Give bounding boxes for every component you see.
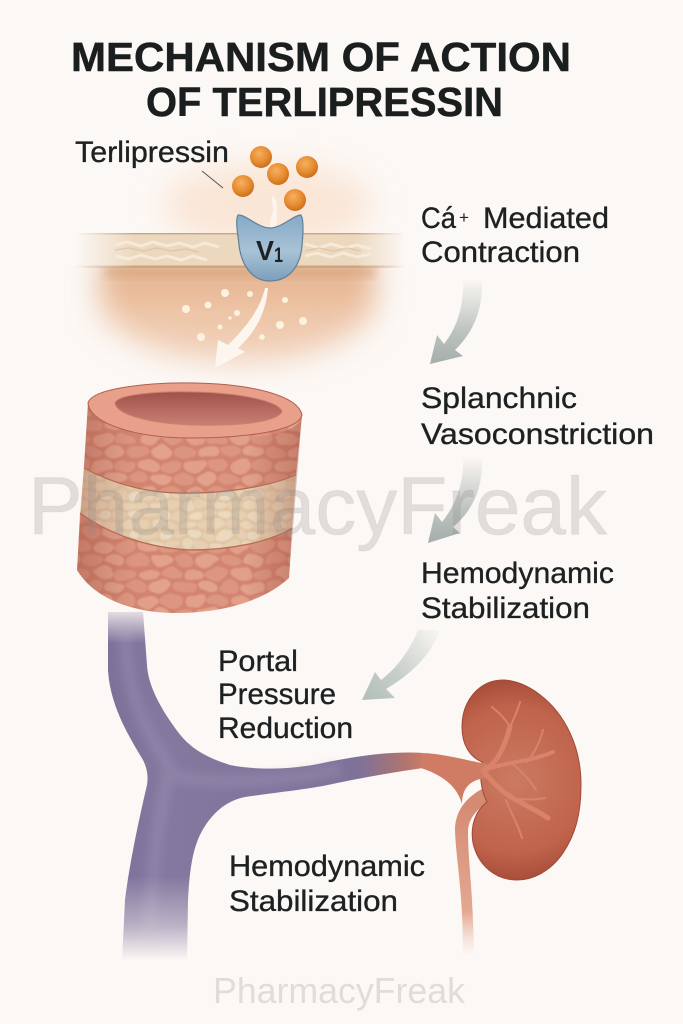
label: splanchnic vasoconstriction: Vasoconstriction (421, 418, 654, 451)
lower muscle layer (77, 514, 292, 613)
label: calcium mediated contraction (421, 202, 609, 269)
panel: receptor and cell membrane (75, 163, 405, 368)
renal artery branches (484, 702, 553, 838)
icon: terlipressin molecules (232, 146, 318, 211)
label: calcium mediated contraction: Mediated (483, 202, 609, 235)
portal vein and renal vessel (108, 612, 423, 962)
label: calcium mediated contraction: + (459, 208, 469, 227)
arrow: stabilization to portal pressure (362, 630, 440, 700)
label: hemodynamic stabilization lower: Stabilization (229, 885, 398, 918)
cell interior particles (182, 289, 307, 341)
label: hemodynamic stabilization upper (421, 557, 614, 625)
label: portal pressure reduction: Portal (218, 645, 298, 678)
icon: kidney (421, 680, 581, 955)
label: hemodynamic stabilization lower (229, 850, 425, 918)
label: hemodynamic stabilization upper: Hemodynamic (421, 557, 614, 590)
renal artery trunk (421, 753, 490, 804)
label: calcium mediated contraction: Cá (421, 202, 457, 235)
arrow: contraction to vasoconstriction (430, 280, 482, 364)
label: portal pressure reduction: Pressure (218, 678, 336, 711)
label: splanchnic vasoconstriction: Splanchnic (421, 382, 577, 415)
side shading (77, 403, 302, 613)
label: hemodynamic stabilization upper: Stabilization (421, 592, 590, 625)
middle beige layer (80, 468, 296, 550)
signal wisp (269, 195, 277, 229)
watermark center: PharmacyFreak (28, 461, 608, 552)
layer edges (80, 468, 296, 550)
cell membrane band (75, 233, 405, 268)
label: calcium mediated contraction: Contraction (421, 236, 580, 269)
upper muscle layer (84, 404, 302, 492)
activation arrow (215, 288, 268, 368)
ureter (455, 786, 491, 955)
label: splanchnic vasoconstriction (421, 382, 654, 451)
terlipressin label: Terlipressin (75, 136, 229, 169)
blood vessel cross-section (77, 382, 302, 613)
title (71, 34, 571, 125)
title: MECHANISM OF ACTION (71, 34, 571, 80)
icon: V1 receptor: 1 (274, 244, 283, 267)
icon: V1 receptor (237, 215, 303, 281)
terlipressin label (75, 136, 229, 188)
label: hemodynamic stabilization lower: Hemodynamic (229, 850, 425, 883)
label: portal pressure reduction: Reduction (218, 712, 353, 745)
vessel rim (88, 383, 302, 438)
icon: V1 receptor: V (256, 235, 274, 266)
watermark bottom: PharmacyFreak (213, 970, 466, 1011)
title: OF TERLIPRESSIN (146, 79, 503, 125)
label: portal pressure reduction (218, 645, 353, 745)
vessel lumen (115, 392, 282, 425)
arrow: vasoconstriction to stabilization (428, 458, 482, 543)
